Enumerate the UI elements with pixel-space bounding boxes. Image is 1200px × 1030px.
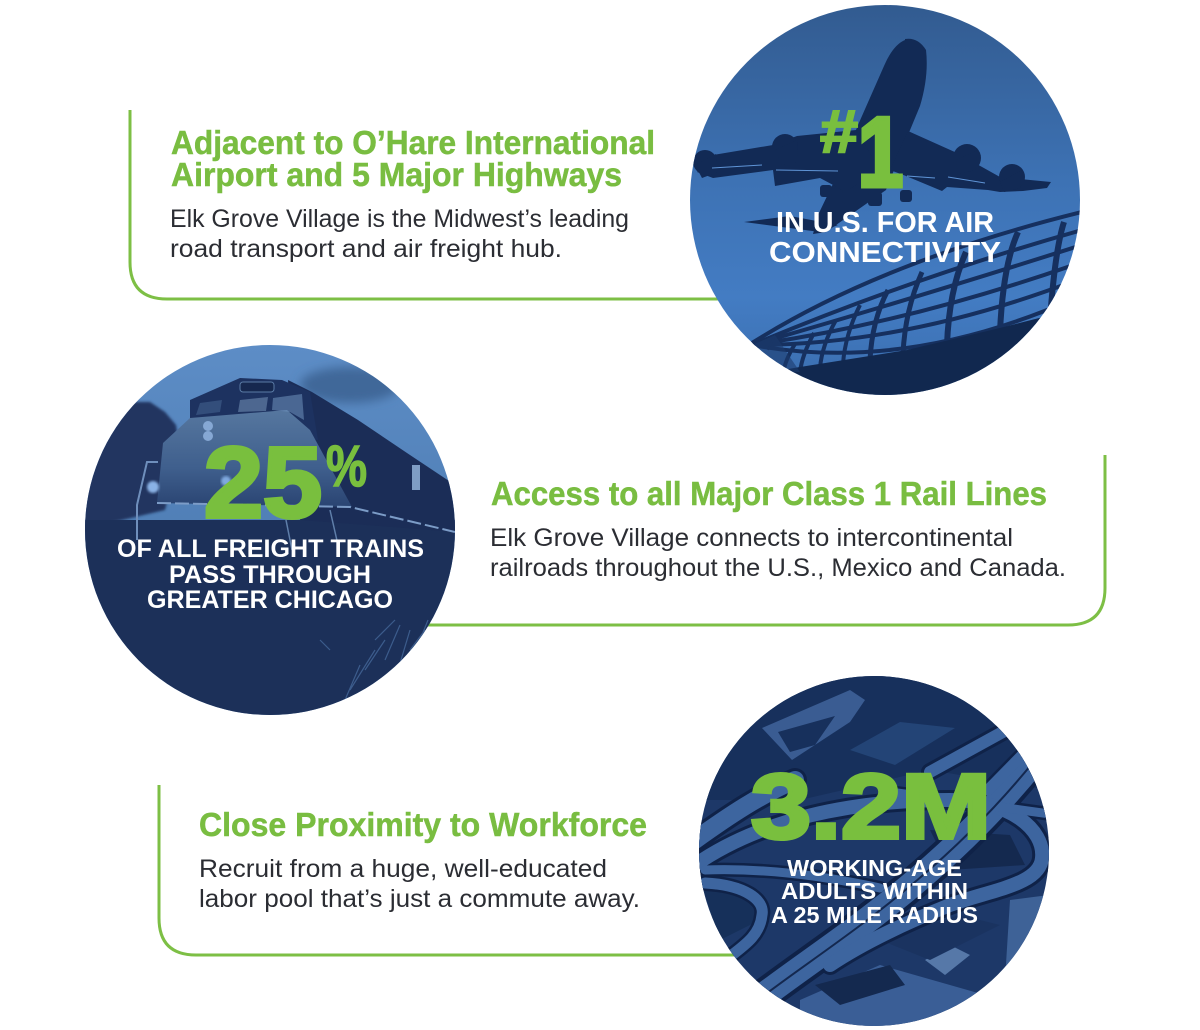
body text: labor pool: labor pool that’s just a commute away. xyxy=(199,885,640,913)
grass xyxy=(320,620,428,700)
body text: intercontinental railroads: railroads throughout the U.S., Mexico and Canada. xyxy=(490,554,1066,582)
stat label: working-age adults xyxy=(771,855,978,928)
heading: workforce proximity: Close Proximity to Workforce xyxy=(199,806,647,843)
body text: intercontinental railroads: Elk Grove Village connects to intercontinental xyxy=(490,524,1013,552)
green bracket line 2 xyxy=(420,455,1105,625)
railing and walkway xyxy=(157,503,455,532)
ground xyxy=(85,520,455,715)
stat: 25% xyxy=(204,427,367,539)
body text: road and air hub xyxy=(170,205,629,263)
panel: rail lines xyxy=(80,345,1105,715)
green bracket line 1 xyxy=(130,110,730,299)
heading: class 1 rail: Access to all Major Class 1 Rail Lines xyxy=(491,475,1047,512)
airplane highlights xyxy=(712,165,985,183)
body text: labor pool: Recruit from a huge, well-educated xyxy=(199,855,607,883)
stat label: freight trains xyxy=(117,535,424,614)
body text: labor pool xyxy=(199,855,640,913)
stat: 3.2M: 3.2M xyxy=(751,756,991,858)
train headlights xyxy=(203,421,213,431)
heading: O'Hare and highways xyxy=(171,124,655,193)
stat: 25%: 25 xyxy=(204,427,322,539)
photo circle: airplane xyxy=(690,5,1095,400)
photo circle: highway interchange xyxy=(695,676,1050,1030)
stat label: freight trains: GREATER CHICAGO xyxy=(147,586,393,614)
body text: intercontinental railroads xyxy=(490,524,1066,582)
city blocks and park xyxy=(699,676,1049,800)
stat label: working-age adults: ADULTS WITHIN xyxy=(781,878,968,904)
heading: O'Hare and highways: Adjacent to O’Hare International xyxy=(171,124,655,161)
stat label: working-age adults: WORKING-AGE xyxy=(787,855,962,881)
green bracket line 3 xyxy=(159,785,745,955)
stat label: working-age adults: A 25 MILE RADIUS xyxy=(771,902,978,928)
stat: #1 xyxy=(820,97,903,207)
photo circle: freight train xyxy=(80,345,456,715)
heading: O'Hare and highways: Airport and 5 Major Highways xyxy=(171,156,622,193)
body text: road and air hub: Elk Grove Village is the Midwest’s leading xyxy=(170,205,629,233)
stat: 25%: % xyxy=(326,434,367,499)
stat: #1: # xyxy=(820,98,858,165)
stat label: in U.S. for air connectivity: IN U.S. FOR AIR xyxy=(776,207,994,239)
stat label: in U.S. for air connectivity xyxy=(769,207,1001,269)
stat label: in U.S. for air connectivity: CONNECTIVITY xyxy=(769,237,1001,269)
panel: workforce xyxy=(159,676,1050,1030)
stat label: freight trains: OF ALL FREIGHT TRAINS xyxy=(117,535,424,563)
body text: road and air hub: road transport and air freight hub. xyxy=(170,235,562,263)
roads xyxy=(695,728,1050,1010)
stat label: freight trains: PASS THROUGH xyxy=(169,561,371,589)
stat: #1: 1 xyxy=(858,97,903,207)
panel: air connectivity xyxy=(130,5,1095,400)
train body xyxy=(288,380,456,532)
airplane xyxy=(693,39,1051,234)
glass building xyxy=(752,212,1082,374)
trees xyxy=(80,400,180,530)
